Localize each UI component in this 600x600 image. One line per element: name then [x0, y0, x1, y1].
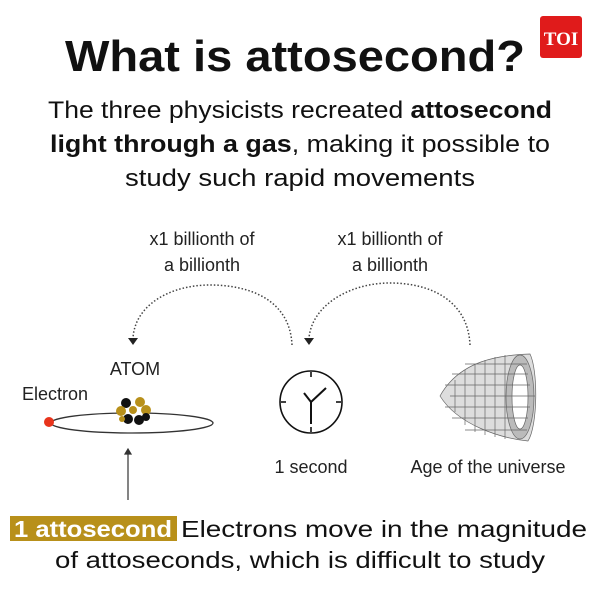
label: Electron: Electron: [22, 384, 88, 404]
callout: bottom text: 1 attosecond: [14, 516, 172, 542]
logo: TOI: [540, 16, 582, 58]
arrow: up to atom: [125, 449, 131, 500]
subtitle: The three physicists recreated attosecond: [48, 97, 552, 124]
label: left scale: a billionth: [164, 255, 240, 275]
label: age of universe: Age of the universe: [410, 457, 566, 477]
subtitle: [48, 97, 552, 192]
title: What is attosecond?: [65, 32, 525, 81]
arrow: second to atom: [128, 285, 292, 345]
label: ATOM: ATOM: [110, 359, 160, 379]
label: left scale: [149, 229, 256, 275]
callout: bottom text: of attoseconds, which is difficult to study: [55, 547, 546, 573]
icon: clock: [280, 371, 342, 433]
logo: TOI: TOI: [544, 29, 578, 50]
label: 1 second: 1 second: [274, 457, 348, 477]
callout: bottom text: Electrons move in the magnitude: [181, 516, 587, 542]
label: right scale: [337, 229, 444, 275]
icon: universe cone: [440, 354, 536, 441]
subtitle: study such rapid movements: [125, 165, 475, 192]
label: right scale: a billionth: [352, 255, 428, 275]
callout: bottom text: [10, 516, 587, 573]
label: right scale: x1 billionth of: [337, 229, 444, 249]
icon: atom orbit: [44, 397, 213, 433]
label: left scale: x1 billionth of: [149, 229, 256, 249]
arrow: universe to second: [304, 283, 470, 345]
subtitle: light through a gas , making it possible to: [50, 131, 550, 158]
